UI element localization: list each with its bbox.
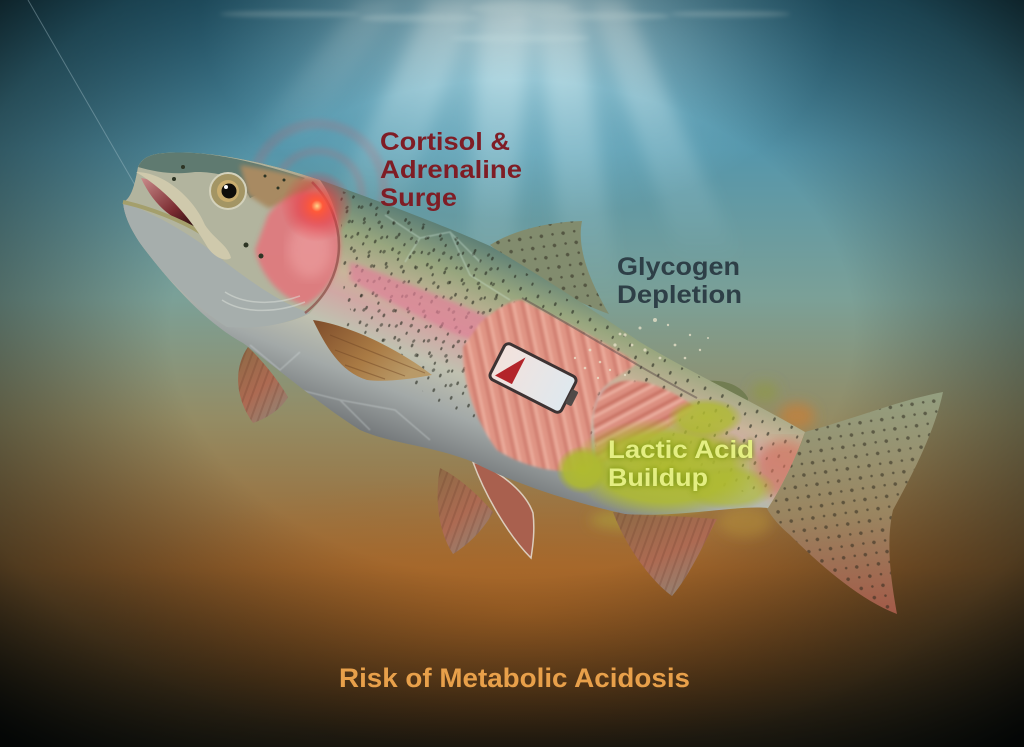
fish [123, 152, 943, 614]
head spots [172, 165, 286, 258]
gill plate edge [305, 182, 339, 313]
belly caustics [250, 345, 430, 440]
label: lactic acid buildup: Buildup [608, 464, 708, 492]
lower jaw silver [123, 202, 310, 328]
fish body [123, 152, 805, 515]
pectoral fin [313, 320, 432, 381]
gill pink [255, 192, 340, 305]
head top [138, 152, 305, 198]
label: glycogen depletion: Depletion [617, 281, 742, 309]
mouth [141, 178, 200, 228]
pink near tail [755, 440, 815, 500]
dorsal fin [490, 221, 609, 314]
label: lactic acid buildup: Lactic Acid [608, 436, 754, 464]
glycogen particles [574, 318, 709, 379]
label: glycogen depletion: Glycogen [617, 253, 740, 281]
label: cortisol and adrenaline surge: Surge [380, 184, 457, 212]
label: lactic acid buildup: Buildup [608, 464, 708, 492]
red hormone glow [281, 170, 353, 242]
maxilla [136, 172, 231, 260]
fishing line [28, 0, 135, 185]
mid muscle [463, 300, 637, 471]
adipose fin [693, 381, 748, 414]
label: cortisol and adrenaline surge: Cortisol & [380, 128, 510, 156]
rear muscle [592, 380, 692, 456]
label: cortisol and adrenaline surge: Adrenaline [380, 156, 522, 184]
lactic acid cloud [556, 398, 776, 518]
eye [210, 173, 246, 209]
head [123, 152, 339, 327]
lower jaw edge [123, 202, 200, 232]
label: risk of metabolic acidosis: Risk of Metabolic Acidosis [339, 663, 690, 693]
water caustics on back [385, 215, 510, 300]
tail fin [765, 392, 943, 614]
ventral fins [438, 462, 534, 558]
acid cloud behind fish [590, 382, 815, 537]
icon: low battery [488, 342, 584, 417]
stress glow: red rings [252, 124, 384, 256]
label: cortisol and adrenaline surge [380, 128, 522, 212]
spots [340, 190, 810, 520]
anal fin [613, 512, 717, 596]
small pectoral fin [238, 347, 288, 423]
back ridge line [522, 298, 697, 398]
label: glycogen depletion [617, 253, 742, 309]
label: lactic acid buildup [608, 436, 754, 492]
label: lactic acid buildup: Lactic Acid [608, 436, 754, 464]
pink lateral stripe [350, 262, 496, 341]
gill folds [222, 292, 305, 310]
